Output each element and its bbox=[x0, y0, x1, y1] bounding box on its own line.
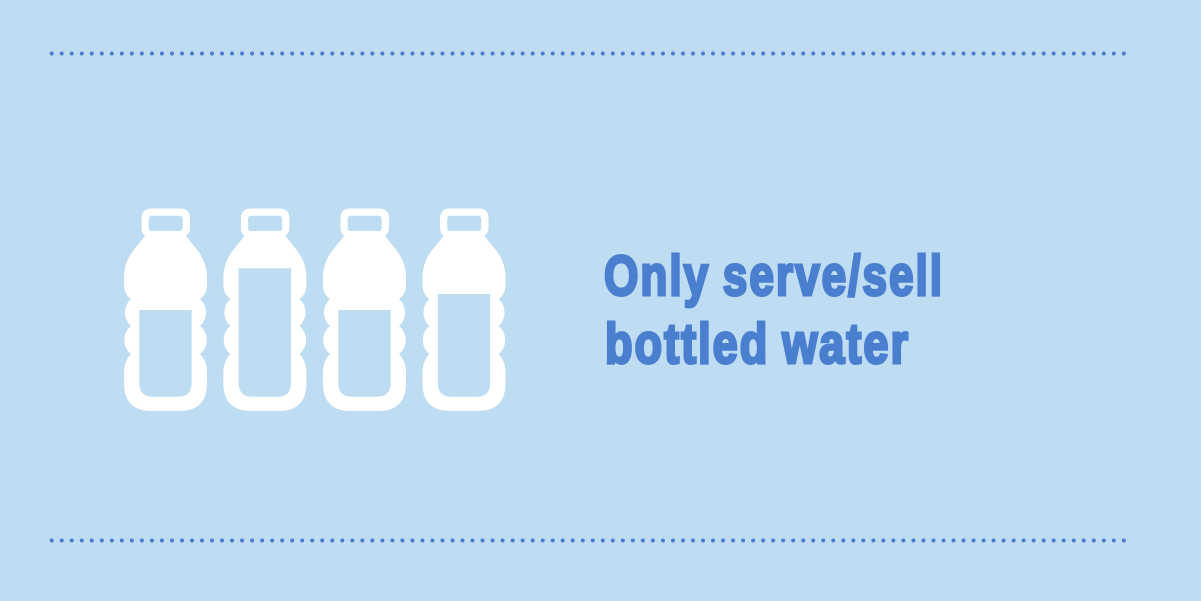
icon: bottle 3 bbox=[323, 208, 406, 411]
icon: bottle 4 bbox=[422, 208, 506, 411]
icon: bottle 1 bbox=[124, 208, 207, 411]
icon: bottle 2 bbox=[223, 208, 306, 411]
heading: only serve/sell bottled water: Only serve/sell bbox=[604, 244, 944, 308]
bottles icon group bbox=[124, 208, 506, 411]
heading: only serve/sell bottled water: bottled water bbox=[605, 312, 910, 376]
heading: only serve/sell bottled water bbox=[604, 244, 944, 376]
